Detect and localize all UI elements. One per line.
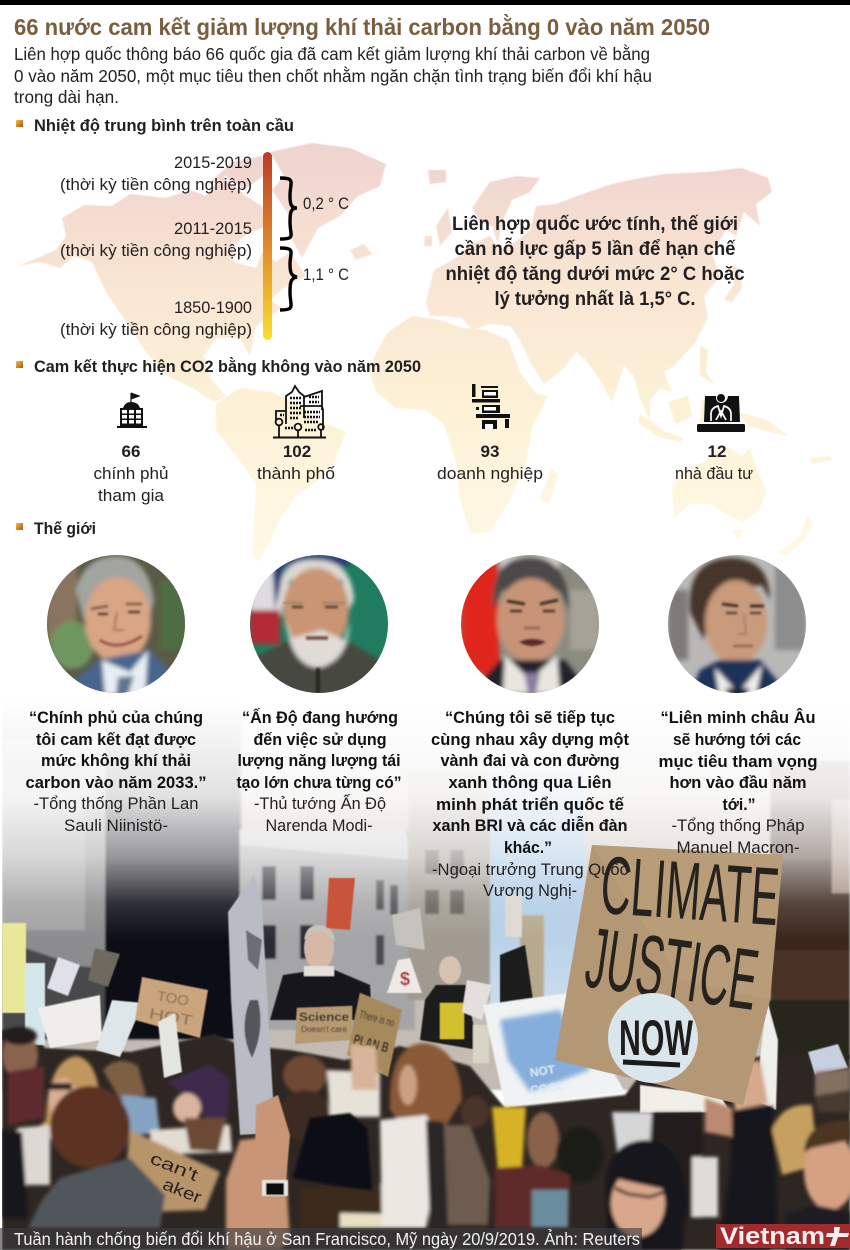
purple hat woman <box>167 1064 230 1130</box>
quote: India: đến việc sử dụng <box>254 730 386 749</box>
cardboard sign lettering: can't <box>147 1149 201 1185</box>
black sleeve <box>718 1106 778 1250</box>
icon: speaker at desk <box>697 394 745 432</box>
right people <box>772 1105 818 1175</box>
curly hair woman <box>390 1043 462 1135</box>
arm <box>226 1135 290 1250</box>
bracket 0.2 <box>280 178 297 239</box>
label: thành phố <box>257 464 336 483</box>
figure 93: 93 <box>481 442 499 461</box>
value 0.2: 0,2 ° C <box>303 194 349 213</box>
money bag <box>387 958 422 993</box>
effigy <box>270 925 372 1020</box>
protest signs and figures <box>2 878 848 1113</box>
logo: Vietnam+: Vietnam <box>720 1223 825 1250</box>
quote: Finland: -Tổng thống Phần Lan <box>34 794 198 813</box>
value 1.1: 1,1 ° C <box>303 265 349 284</box>
quote: China <box>431 708 629 900</box>
intro text <box>14 43 652 107</box>
quote: China: khác.” <box>504 838 552 857</box>
stat: governments <box>94 393 168 505</box>
figure 66: 66 <box>122 442 140 461</box>
heading: CO2 commitments: Cam kết thực hiện CO2 bằng không vào năm 2050 <box>34 357 421 376</box>
small effigy <box>420 956 492 1063</box>
quote: India: -Thủ tướng Ấn Độ <box>254 794 386 813</box>
thermometer gradient bar <box>263 152 272 340</box>
cardboard sign lettering <box>151 1156 202 1202</box>
quote: France: hơn vào đầu năm <box>670 773 806 792</box>
stat: cities <box>257 386 336 483</box>
left people <box>2 1038 40 1074</box>
middle people <box>461 1096 489 1128</box>
callout: UN estimate: cần nỗ lực gấp 5 lần để hạn chế <box>454 236 736 260</box>
left posters <box>2 923 26 1013</box>
right side of arm: dark hair <box>283 1055 327 1095</box>
quote: China: xanh thông qua Liên <box>448 773 612 792</box>
sign: climate justice now <box>555 840 783 1105</box>
title: 66 nước cam kết giảm lượng khí thải carbon bằng 0 vào năm 2050 <box>14 13 710 40</box>
sign: plan b: PLAN B <box>352 1031 391 1056</box>
portrait: Sauli Niinistö <box>47 555 186 700</box>
sign: not cool <box>483 993 625 1106</box>
right effigy hand <box>500 945 533 1005</box>
quote: China: xanh BRI và các diễn đàn <box>432 816 628 835</box>
quote: India: lượng năng lượng tái <box>238 751 400 770</box>
year labels: (thời kỳ tiền công nghiệp) <box>60 320 252 339</box>
figure 12: 12 <box>708 442 726 461</box>
world map background <box>18 143 832 562</box>
sign: science <box>295 1006 352 1044</box>
logo: Vietnam+ <box>716 1223 850 1250</box>
quote: Finland <box>26 708 206 835</box>
quote: India: “Ấn Độ đang hướng <box>242 708 398 727</box>
quote: Finland: Sauli Niinistö- <box>64 816 168 835</box>
protest signs and figures: $ <box>400 969 410 989</box>
callout: UN estimate: nhiệt độ tăng dưới mức 2° C hoặc <box>446 263 745 285</box>
quote: France: Manuel Macron- <box>676 838 800 857</box>
quote: China: -Ngoại trưởng Trung Quốc <box>432 860 628 879</box>
icon: government building <box>117 393 147 428</box>
sign: science: Doesn't care <box>301 1025 348 1034</box>
quote: India <box>236 708 402 835</box>
quote: Finland: “Chính phủ của chúng <box>29 708 203 727</box>
cardboard sign: too hot: HOT <box>148 1005 194 1030</box>
year labels: 2011-2015 <box>174 219 252 238</box>
caption bar: Tuần hành chống biến đổi khí hậu ở San Francisco, Mỹ ngày 20/9/2019. Ảnh: Reuters <box>14 1228 640 1249</box>
quote: India: tạo lớn chưa từng có” <box>236 773 402 792</box>
callout: UN estimate <box>446 213 745 310</box>
quote: France: -Tổng thống Pháp <box>672 816 804 835</box>
callout: UN estimate: Liên hợp quốc ước tính, thế giới <box>452 213 738 235</box>
quote: India: Narenda Modi- <box>266 816 372 835</box>
quote: China: cùng nhau xây dựng một <box>431 730 629 749</box>
photo: climate march <box>0 680 850 1250</box>
quote: Finland: carbon vào năm 2033.” <box>26 773 206 792</box>
sign: science: Science <box>299 1010 349 1024</box>
stat: investors <box>675 394 753 483</box>
sign: plan b <box>347 993 402 1077</box>
quote: China: vành đai và con đường <box>440 751 620 770</box>
cardboard sign: too hot: TOO <box>156 987 190 1009</box>
heading: world: Thế giới <box>34 520 96 538</box>
icon: city skyline <box>273 386 326 438</box>
portrait: Wang Yi <box>461 555 600 693</box>
quote: China: Vương Nghị- <box>483 881 577 900</box>
hair and hoodie front <box>125 1130 220 1212</box>
crowd people <box>2 1027 850 1250</box>
sign: not cool: COOL <box>529 1079 566 1097</box>
sign: plan b: There is no <box>358 1009 396 1030</box>
quote: France: mục tiêu tham vọng <box>658 752 818 771</box>
girl with glasses <box>606 1140 686 1250</box>
crowd base <box>2 1028 850 1250</box>
quote: France: tới.” <box>722 795 756 814</box>
white sign behind hand <box>640 1085 730 1113</box>
year labels <box>60 153 252 339</box>
portrait: Emmanuel Macron <box>668 555 806 700</box>
label: doanh nghiệp <box>437 464 543 483</box>
heading: global average temperature: Nhiệt độ trung bình trên toàn cầu <box>34 117 294 135</box>
tall white placard <box>158 1013 182 1078</box>
bracket 1.1 <box>280 248 297 310</box>
top black bar <box>0 0 850 5</box>
tall grey sign <box>228 875 275 1135</box>
quote: Finland: mức không khí thải <box>41 751 191 770</box>
portrait: Narendra Modi <box>250 555 388 700</box>
cardboard sign: too hot <box>135 977 208 1038</box>
year labels: (thời kỳ tiền công nghiệp) <box>60 175 252 194</box>
icon: office building <box>472 384 510 429</box>
fade to white <box>0 700 850 940</box>
label: chính phủ <box>94 464 168 483</box>
sign: not cool: NOT <box>529 1062 557 1080</box>
quote: Finland: tôi cam kết đạt được <box>36 730 196 749</box>
year labels: (thời kỳ tiền công nghiệp) <box>60 241 252 260</box>
figure 102: 102 <box>283 442 311 461</box>
intro text: Liên hợp quốc thông báo 66 quốc gia đã cam kết giảm lượng khí thải carbon về bằng <box>14 43 650 64</box>
quote: France <box>658 708 818 857</box>
year labels: 1850-1900 <box>174 298 252 317</box>
stat: governments: tham gia <box>98 486 165 505</box>
quote: France: sẽ hướng tới các <box>673 730 801 749</box>
callout: UN estimate: lý tưởng nhất là 1,5° C. <box>494 288 696 310</box>
black bucket hat <box>293 1113 372 1190</box>
year labels: 2015-2019 <box>174 153 252 172</box>
label: nhà đầu tư <box>675 464 753 483</box>
stat: businesses <box>437 384 543 483</box>
quote: France: “Liên minh châu Âu <box>660 708 816 727</box>
sign: climate justice now: NOW <box>619 1010 693 1066</box>
banner <box>326 878 355 930</box>
intro text: 0 vào năm 2050, một mục tiêu then chốt nhằm ngăn chặn tình trạng biến đổi khí hậu <box>14 65 652 86</box>
photo background: buildings and sky <box>2 690 850 1090</box>
quote: China: “Chúng tôi sẽ tiếp tục <box>445 708 615 727</box>
quote: China: minh phát triển quốc tế <box>436 795 625 814</box>
cardboard sign lettering: aker <box>160 1175 205 1207</box>
intro text: trong dài hạn. <box>14 87 119 107</box>
hand and watch <box>255 1095 290 1196</box>
panel: temperature scale <box>60 152 349 340</box>
